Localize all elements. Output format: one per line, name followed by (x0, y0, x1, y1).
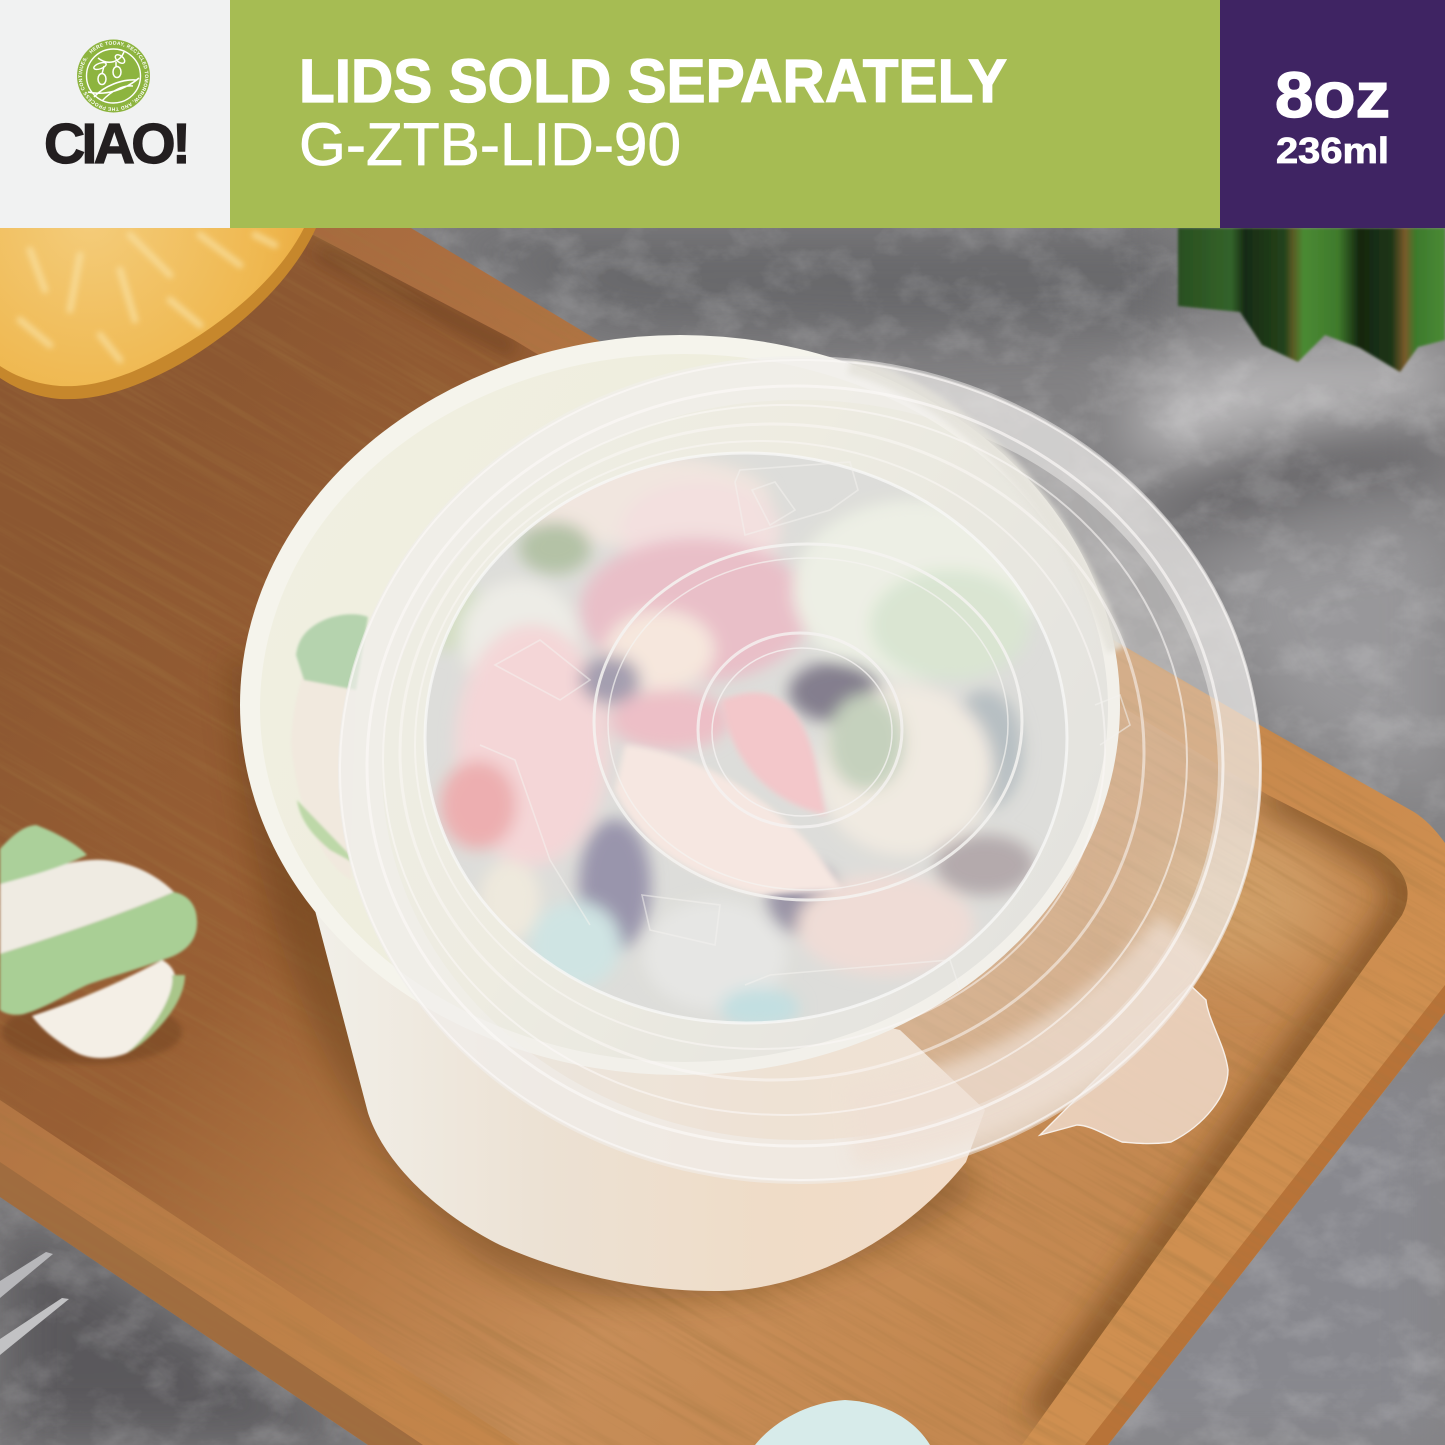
frosted lid ring (338, 358, 1262, 1182)
cup shadow on board (230, 660, 980, 1299)
logo wordmark: CIAO! (44, 112, 191, 176)
marshmallow inside bowl (291, 614, 368, 880)
size in millilitres: 236ml (1276, 130, 1389, 171)
header bar (0, 0, 1445, 228)
lid centre rings (594, 544, 1022, 900)
bowl contents: marshmallows seen through the lid (418, 450, 1080, 1030)
clear plastic lid (338, 358, 1262, 1182)
heading panel (230, 0, 1220, 228)
size in ounces: 8oz (1275, 59, 1390, 131)
blue marshmallow at bottom edge (755, 1400, 930, 1445)
marshmallow twist on board (0, 825, 197, 1058)
softened lid areas, clipped to the lid (850, 365, 1190, 1125)
product code: G-ZTB-LID-90 (299, 111, 681, 178)
paper bowl (240, 335, 1120, 1291)
fork tines (0, 1252, 69, 1355)
lid well rim (425, 453, 1067, 1023)
bowl body (312, 899, 985, 1291)
marshmallow shadow (2, 1000, 182, 1064)
bowl inner wall (260, 354, 1108, 1062)
lid embossed marks and notches (480, 462, 1130, 990)
green sponge cake in background (1178, 228, 1445, 372)
lemon slice (0, 228, 316, 399)
lid concentric grooves (340, 360, 1260, 1180)
logo badge: HERE TODAY, RECYCLED TOMORROW, AND THE PROCESS CONTINUES. (78, 41, 148, 111)
lid pull tab (1040, 985, 1228, 1144)
size panel (1220, 0, 1445, 228)
lid outer lip (360, 378, 1240, 1162)
bowl rim (240, 335, 1120, 1075)
heading: LIDS SOLD SEPARATELY (299, 47, 1007, 115)
logo panel (0, 0, 230, 228)
